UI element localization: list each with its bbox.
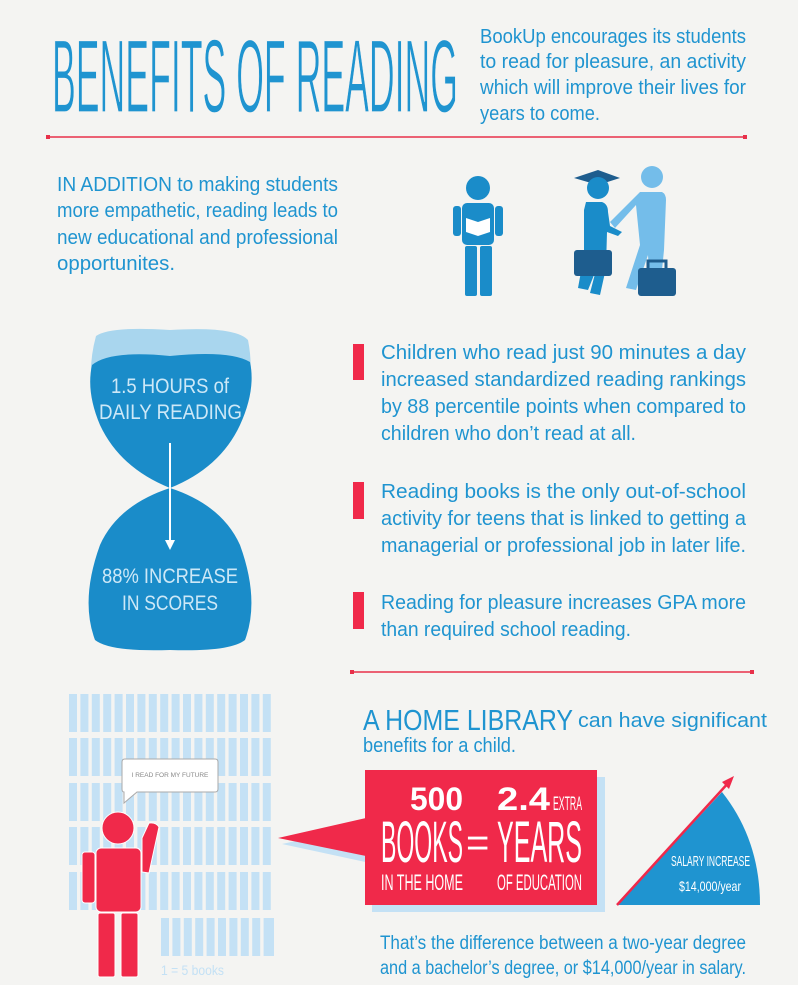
bookshelf chart — [69, 694, 274, 978]
hourglass: reading stat — [89, 329, 252, 650]
bullet list: Reading for pleasure increases GPA more — [381, 592, 746, 614]
icon: red person — [82, 812, 159, 977]
heading: home library: A HOME LIBRARY — [363, 705, 573, 737]
intro text: to read for pleasure, an activity — [480, 51, 746, 73]
text: in addition — [57, 174, 338, 275]
speech bubble — [122, 759, 218, 803]
text: in addition: new educational and professional — [57, 227, 338, 249]
bullet list: increased standardized reading rankings — [381, 369, 746, 391]
intro text: which will improve their lives for — [479, 77, 746, 99]
speech bubble: I READ FOR MY FUTURE — [132, 772, 209, 779]
bullet list: managerial or professional job in later life. — [381, 535, 746, 557]
heading: home library: benefits for a child. — [363, 735, 516, 757]
callout: 500 books = 2.4 years — [278, 770, 605, 912]
bullet list: than required school reading. — [381, 619, 631, 641]
intro text — [479, 26, 746, 125]
callout: 500 books = 2.4 years: EXTRA — [553, 794, 582, 815]
icon: child reading — [453, 176, 503, 296]
callout: 500 books = 2.4 years: = — [466, 821, 489, 865]
bullet list: by 88 percentile points when compared to — [381, 396, 746, 418]
bullet list: children who don’t read at all. — [381, 423, 636, 445]
caption text: That’s the difference between a two-year degree — [380, 933, 746, 954]
hourglass: reading stat: 1.5 HOURS of — [111, 375, 229, 398]
caption text — [380, 933, 746, 979]
text: in addition: more empathetic, reading leads to — [57, 200, 338, 222]
hourglass: reading stat: 88% INCREASE — [102, 565, 238, 588]
hourglass: reading stat: IN SCORES — [122, 592, 218, 615]
chart: salary increase: $14,000/year — [679, 878, 741, 894]
text: in addition: IN ADDITION to making students — [57, 174, 338, 196]
callout: 500 books = 2.4 years: 500 — [410, 781, 463, 817]
callout: 500 books = 2.4 years: BOOKS — [381, 810, 463, 875]
callout: 500 books = 2.4 years: YEARS — [497, 810, 582, 875]
text: in addition: opportunites. — [57, 253, 175, 275]
chart: salary increase — [617, 776, 760, 905]
bullet list: Children who read just 90 minutes a day — [381, 342, 746, 364]
intro text: BookUp encourages its students — [480, 26, 746, 48]
heading: home library: can have significant — [578, 710, 767, 732]
bullet list: activity for teens that is linked to getting a — [381, 508, 747, 530]
callout: 500 books = 2.4 years: 2.4 — [497, 781, 550, 817]
intro text: years to come. — [480, 103, 600, 125]
heading: home library — [363, 705, 767, 757]
icon: graduate handshake — [574, 166, 676, 296]
bookshelf chart: 1 = 5 books — [161, 962, 224, 978]
caption text: and a bachelor’s degree, or $14,000/year in salary. — [380, 958, 746, 979]
bullet list: Reading books is the only out-of-school — [381, 481, 746, 503]
hourglass: reading stat: DAILY READING — [99, 401, 242, 424]
bullet list — [353, 342, 747, 641]
callout: 500 books = 2.4 years: OF EDUCATION — [497, 870, 582, 895]
callout: 500 books = 2.4 years: IN THE HOME — [381, 870, 463, 895]
